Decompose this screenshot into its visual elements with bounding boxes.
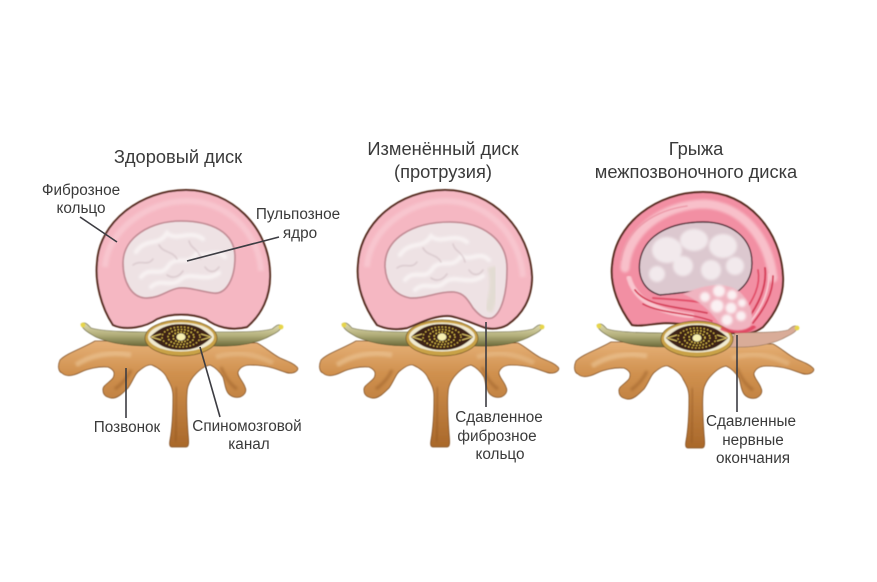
label: nucleus pulposus: Пульпозное xyxy=(256,206,340,223)
label: nucleus pulposus xyxy=(187,206,340,261)
heading: healthy disc: Здоровый диск xyxy=(114,146,243,167)
label: compressed annulus xyxy=(455,322,543,463)
label: compressed annulus: кольцо xyxy=(475,446,525,463)
label: compressed annulus: Сдавленное xyxy=(455,409,543,426)
label: spinal canal: канал xyxy=(228,436,270,453)
heading: protrusion xyxy=(367,138,520,182)
label: compressed annulus: фиброзное xyxy=(457,428,537,445)
label: compressed nerve endings: окончания xyxy=(716,450,790,467)
label: nucleus pulposus: ядро xyxy=(283,225,317,242)
label: compressed nerve endings: Сдавленные xyxy=(706,413,796,430)
label: compressed nerve endings: нервные xyxy=(722,432,784,449)
illustration: herniated disc and vertebra xyxy=(575,192,814,448)
label: compressed nerve endings xyxy=(706,335,796,467)
panel: protrusion xyxy=(320,138,559,463)
illustration: healthy disc and vertebra xyxy=(59,190,298,447)
label: vertebra xyxy=(94,368,161,436)
label: annulus fibrosus: Фиброзное xyxy=(42,182,120,199)
heading: herniated disc: межпозвоночного диска xyxy=(595,161,798,182)
label: spinal canal: Спиномозговой xyxy=(192,418,302,435)
illustration: protruding disc and vertebra xyxy=(320,190,559,447)
panel: healthy disc xyxy=(42,146,340,453)
label: annulus fibrosus xyxy=(42,182,120,242)
label: spinal canal xyxy=(192,347,302,453)
heading: herniated disc: Грыжа xyxy=(669,138,724,159)
heading: herniated disc xyxy=(595,138,798,182)
panel: herniated disc xyxy=(575,138,814,467)
label: annulus fibrosus: кольцо xyxy=(56,200,106,217)
heading: protrusion: (протрузия) xyxy=(394,161,492,182)
heading: protrusion: Изменённый диск xyxy=(367,138,520,159)
label: vertebra: Позвонок xyxy=(94,419,161,436)
